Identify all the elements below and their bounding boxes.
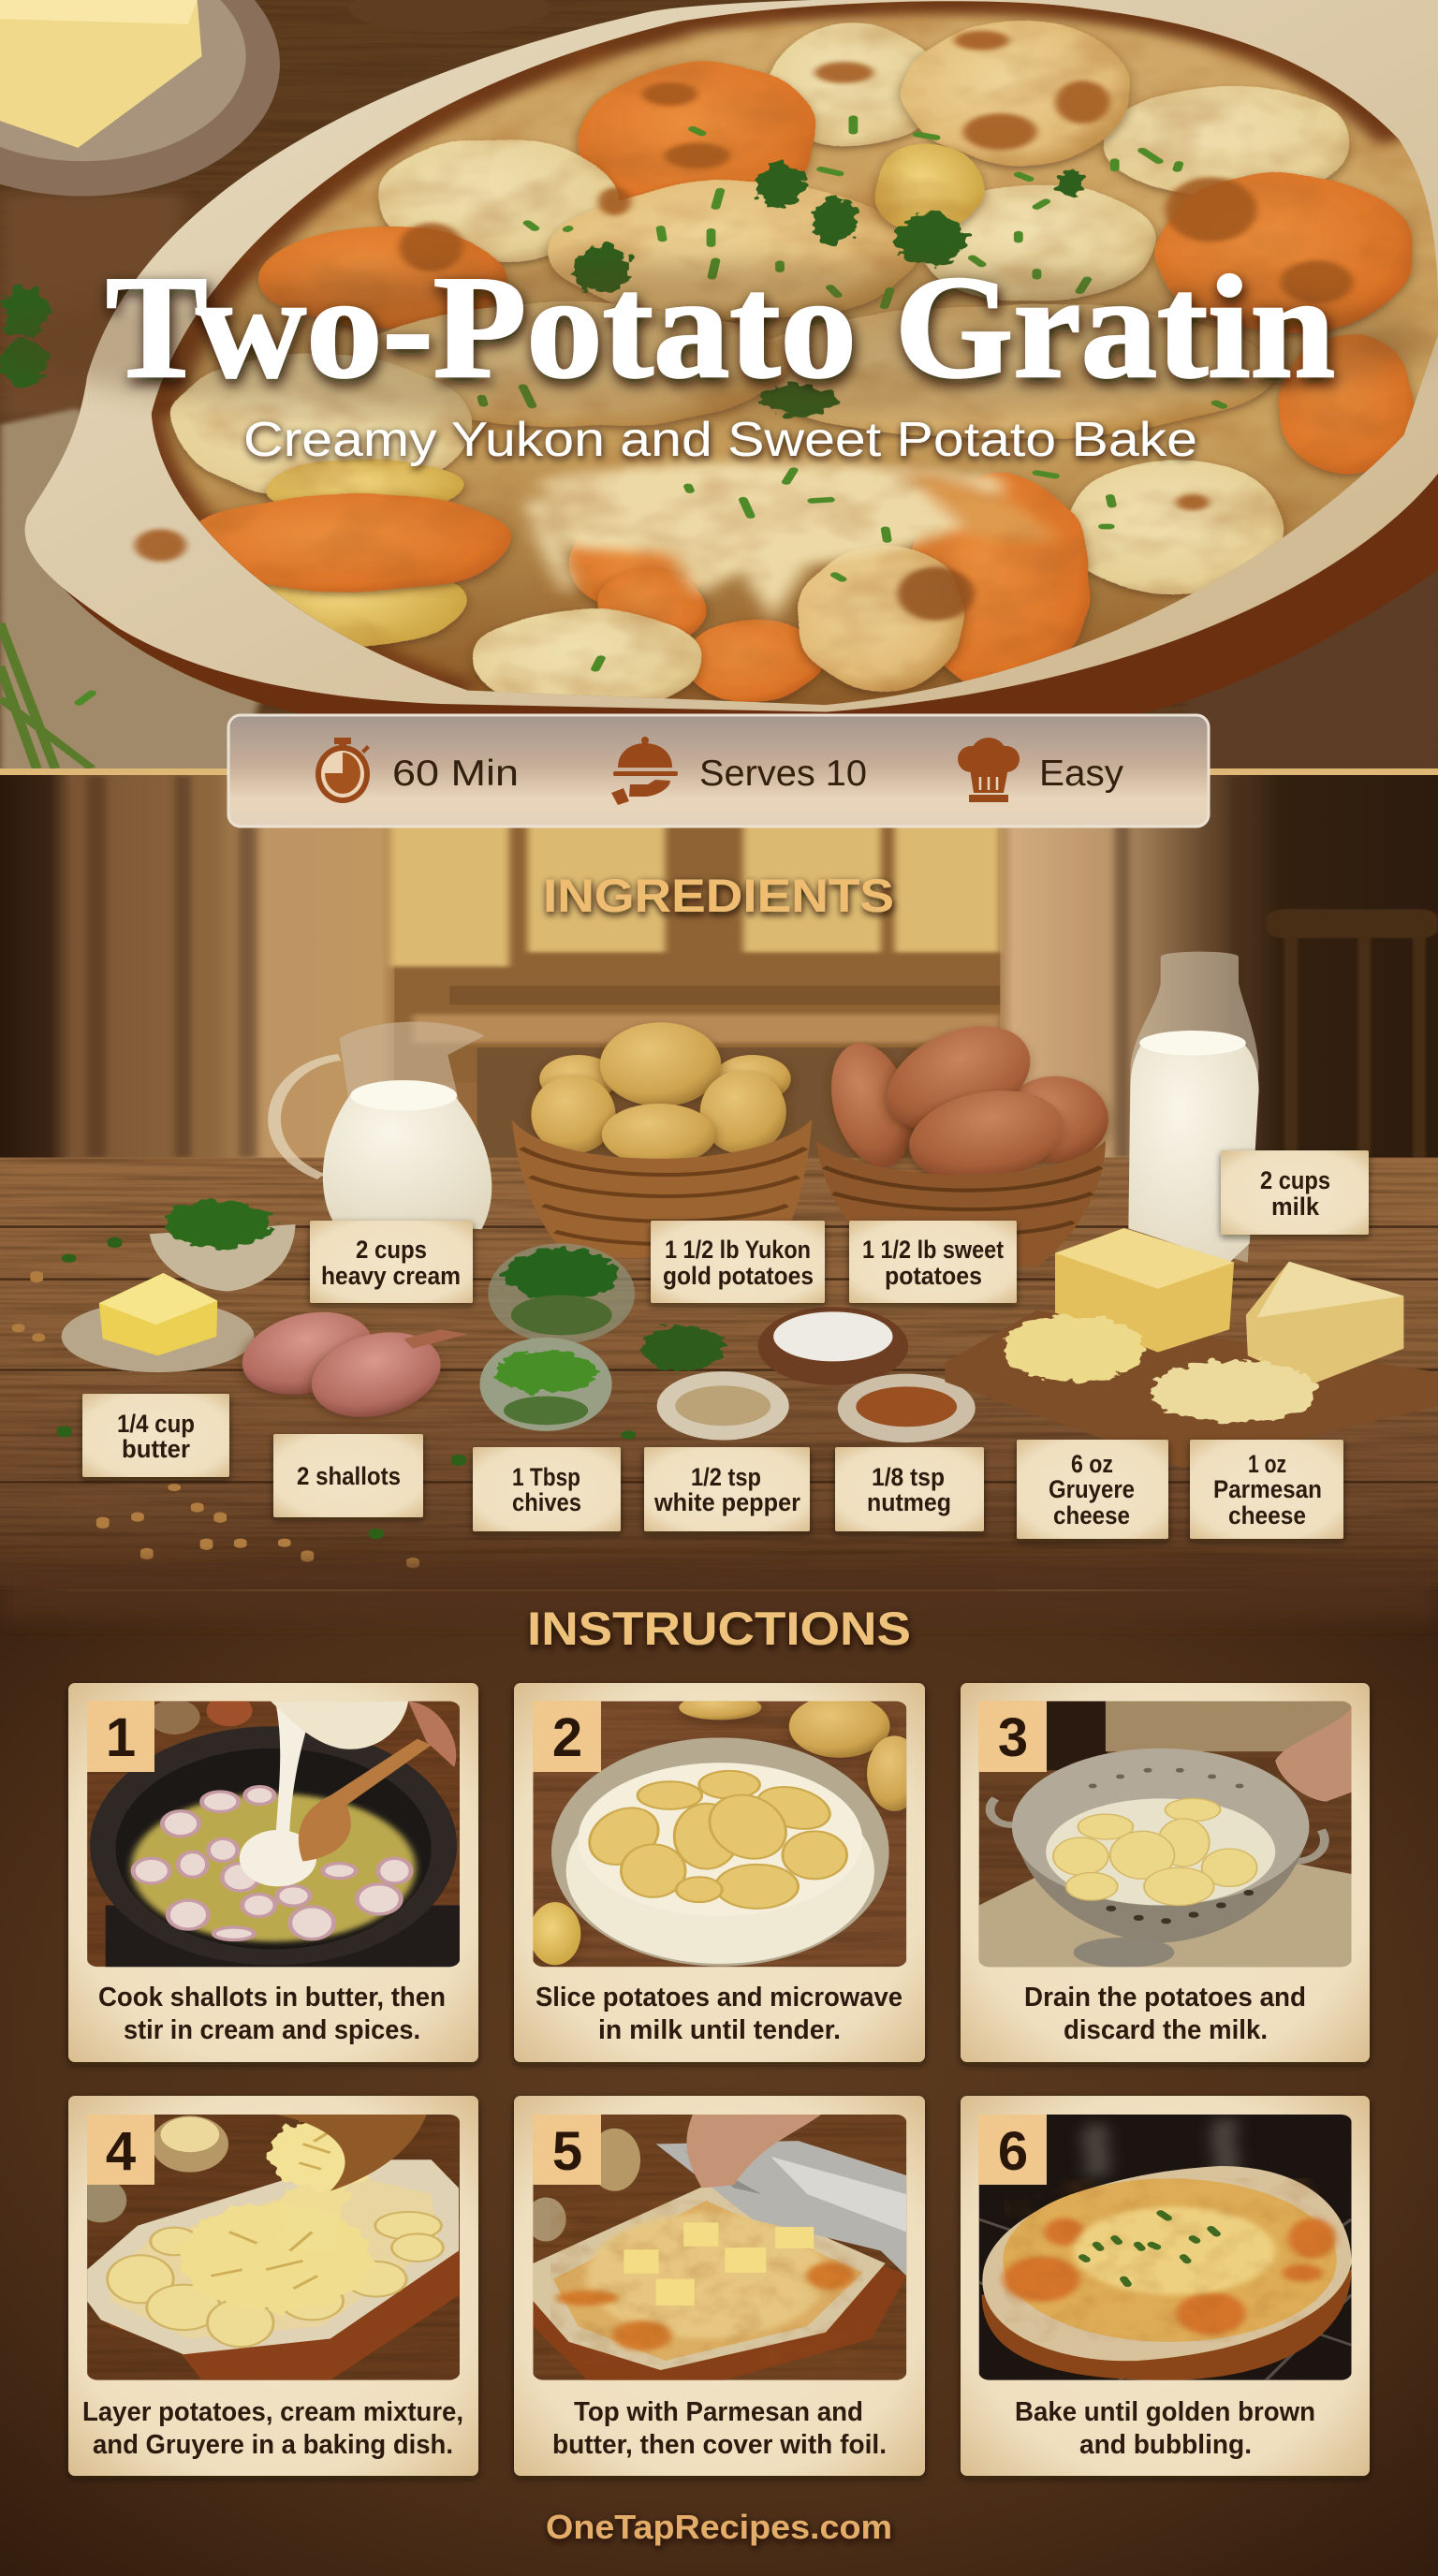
label: parmesan: 1 oz — [1248, 1450, 1286, 1478]
badge 3: 3 — [998, 1707, 1028, 1768]
footer website: OneTapRecipes.com — [546, 2508, 892, 2546]
chives bowl — [480, 1338, 612, 1431]
label: shallots — [273, 1434, 423, 1517]
label: white pepper: white pepper — [653, 1488, 800, 1516]
caption 4: Layer potatoes, cream mixture, — [82, 2397, 463, 2427]
baked crust edge — [152, 1, 1400, 691]
label: nutmeg — [835, 1447, 984, 1531]
dark vignette behind title — [0, 263, 1431, 424]
label: sweet potatoes: potatoes — [885, 1262, 982, 1290]
label: chives — [473, 1447, 621, 1531]
white pepper bowl — [657, 1371, 789, 1441]
cheese board — [945, 1228, 1438, 1468]
gold divider — [0, 768, 1438, 775]
icon: serving cloche with hand — [611, 737, 678, 805]
table top — [0, 1158, 1438, 1589]
crumbs — [19, 1275, 413, 1565]
caption 3 — [1024, 1983, 1306, 2045]
label: chives: 1 Tbsp — [512, 1463, 580, 1491]
subtitle: Creamy Yukon and Sweet Potato Bake — [243, 413, 1197, 467]
step card 4 — [68, 2096, 478, 2476]
caption 3: discard the milk. — [1064, 2015, 1268, 2045]
salt bowl — [757, 1307, 908, 1385]
icon: stopwatch — [315, 738, 370, 803]
browned spots — [135, 31, 1353, 621]
caption 6: and bubbling. — [1079, 2430, 1252, 2460]
badge 5: 5 — [552, 2121, 582, 2182]
badge 6 — [978, 2115, 1047, 2185]
caption 1: stir in cream and spices. — [124, 2015, 420, 2045]
caption 3: Drain the potatoes and — [1024, 1983, 1306, 2012]
step 6 image: baked gratin in oven — [979, 2115, 1352, 2380]
step card 3 — [961, 1683, 1370, 2062]
label: milk — [1221, 1150, 1369, 1235]
dish cream rim — [25, 0, 1438, 712]
chive flecks — [79, 118, 1223, 703]
label: chives: chives — [512, 1488, 581, 1516]
caption 4 — [82, 2397, 463, 2460]
yukon potatoes basket — [512, 1022, 812, 1258]
label: nutmeg: nutmeg — [867, 1488, 951, 1516]
melted cheese — [523, 462, 1055, 623]
panel: ingredients table scene — [0, 773, 1438, 1597]
label: heavy cream — [310, 1221, 473, 1303]
badge 4: 4 — [106, 2121, 136, 2182]
label: yukon potatoes: 1 1/2 lb Yukon — [665, 1236, 811, 1264]
parsley bowl — [150, 1200, 296, 1291]
badge 6: 6 — [998, 2121, 1028, 2182]
chives on cloth — [0, 623, 92, 768]
badge 4 — [87, 2115, 154, 2185]
label: gruyere: cheese — [1053, 1501, 1130, 1530]
label: milk: milk — [1271, 1193, 1320, 1221]
label: yukon potatoes — [651, 1221, 825, 1303]
caption 1: Cook shallots in butter, then — [98, 1983, 446, 2012]
step card 1 — [68, 1683, 478, 2062]
potato slices — [169, 19, 1417, 712]
chair — [1266, 909, 1438, 1158]
label: milk: 2 cups — [1260, 1166, 1330, 1194]
label: sweet potatoes — [849, 1221, 1017, 1303]
label: parmesan — [1190, 1440, 1343, 1539]
step 1 image: shallots in pan — [87, 1695, 460, 1969]
caption 4: and Gruyere in a baking dish. — [93, 2430, 453, 2460]
step card 5 — [514, 2096, 925, 2476]
herb bowl — [488, 1243, 635, 1344]
caption 5 — [552, 2397, 887, 2460]
badge 2 — [533, 1701, 601, 1772]
caption 5: Top with Parmesan and — [574, 2397, 863, 2427]
step 2 image: potatoes in milk bowl — [529, 1695, 922, 1967]
step 3 image: colander — [979, 1701, 1352, 1968]
dish outer wall — [27, 451, 1438, 725]
caption 2: Slice potatoes and microwave — [536, 1983, 902, 2012]
dish interior — [152, 1, 1438, 705]
parsley — [0, 163, 1086, 417]
curtains — [87, 776, 1248, 1158]
caption 5: butter, then cover with foil. — [552, 2430, 887, 2460]
step 4 image: layering in dish — [75, 2115, 460, 2380]
heading: instructions: INSTRUCTIONS — [527, 1603, 911, 1655]
label: gruyere: 6 oz — [1071, 1450, 1113, 1478]
label: nutmeg: 1/8 tsp — [872, 1463, 945, 1491]
butter plate — [0, 0, 280, 197]
60 min: 60 Min — [392, 754, 519, 794]
badge 1 — [87, 1701, 154, 1772]
label: white pepper: 1/2 tsp — [691, 1463, 761, 1491]
label: yukon potatoes: gold potatoes — [663, 1262, 814, 1290]
badge 3 — [978, 1701, 1047, 1772]
caption 6: Bake until golden brown — [1015, 2397, 1315, 2427]
label: parmesan: Parmesan — [1213, 1475, 1322, 1503]
badge 5 — [533, 2115, 601, 2185]
milk bottle — [1128, 952, 1259, 1263]
pitcher of cream — [274, 1022, 492, 1229]
step card 2 — [514, 1683, 925, 2062]
label: gruyere: Gruyere — [1049, 1475, 1135, 1503]
label: shallots: 2 shallots — [297, 1462, 401, 1490]
window — [389, 777, 1009, 1163]
caption 2 — [536, 1983, 902, 2045]
label: heavy cream: heavy cream — [321, 1262, 461, 1290]
step card 6 — [961, 2096, 1370, 2476]
title: Two-Potato Gratin — [106, 245, 1335, 408]
label: butter — [82, 1394, 229, 1477]
caption 2: in milk until tender. — [598, 2015, 841, 2045]
heading: ingredients: INGREDIENTS — [543, 870, 894, 922]
label: parmesan: cheese — [1228, 1501, 1306, 1530]
panel: instructions background — [0, 1591, 1438, 2576]
label: white pepper — [644, 1447, 810, 1531]
label: sweet potatoes: 1 1/2 lb sweet — [862, 1236, 1004, 1264]
label: gruyere — [1017, 1440, 1168, 1539]
badge 2: 2 — [552, 1707, 582, 1768]
nutmeg bowl — [838, 1374, 976, 1442]
panel: hero photo of gratin dish — [0, 0, 1438, 842]
icon: chef hat — [958, 738, 1020, 802]
label: heavy cream: 2 cups — [356, 1236, 427, 1264]
serves 10: Serves 10 — [699, 754, 867, 794]
caption 1 — [98, 1983, 446, 2045]
butter plate — [62, 1273, 254, 1372]
sweet potatoes basket — [816, 1016, 1108, 1267]
easy: Easy — [1039, 754, 1124, 794]
shallots — [217, 1301, 468, 1427]
info bar — [228, 715, 1209, 827]
step 5 image: parmesan and foil — [526, 2115, 906, 2380]
label: butter: 1/4 cup — [117, 1410, 195, 1438]
label: butter: butter — [122, 1435, 190, 1463]
caption 6 — [1015, 2397, 1315, 2460]
badge 1: 1 — [106, 1707, 136, 1768]
